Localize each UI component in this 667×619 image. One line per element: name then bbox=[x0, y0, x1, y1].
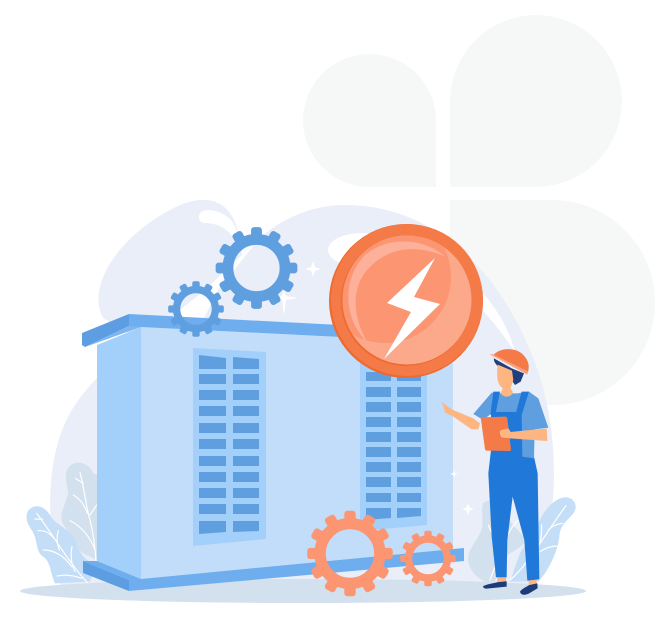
neck and head bbox=[497, 365, 513, 397]
icon: lightning bolt bbox=[384, 258, 440, 359]
hair bbox=[494, 358, 524, 385]
shoes bbox=[483, 581, 538, 595]
sparkles bbox=[276, 261, 474, 515]
forearm bbox=[500, 428, 547, 441]
building bbox=[82, 314, 464, 591]
window panel right bbox=[360, 340, 427, 531]
background petals bbox=[303, 15, 655, 405]
gear: small blue bbox=[168, 281, 224, 337]
gear: large orange bbox=[307, 511, 393, 596]
overalls bbox=[488, 412, 539, 581]
clipboard bbox=[481, 417, 511, 451]
hard hat bbox=[489, 349, 529, 374]
plant: left gray leaf bbox=[61, 463, 97, 562]
lavender background blob bbox=[50, 200, 554, 585]
gear: large blue bbox=[216, 227, 297, 309]
overall straps bbox=[490, 392, 529, 415]
shirt bbox=[473, 392, 548, 458]
pointing arm bbox=[441, 402, 480, 429]
roof bbox=[82, 314, 340, 347]
plinth bbox=[83, 548, 464, 591]
ankles bbox=[497, 575, 537, 586]
gear: small orange bbox=[400, 531, 456, 586]
building left face bbox=[97, 327, 141, 579]
ground shadow bbox=[20, 579, 586, 603]
coin with lightning bolt bbox=[329, 224, 483, 378]
plant: left blue leaf bbox=[27, 506, 97, 583]
window panel left bbox=[193, 348, 266, 546]
plant: right gray leaf bbox=[468, 501, 527, 582]
worker bbox=[441, 349, 548, 595]
white swooshes in blob bbox=[170, 210, 515, 352]
plant: right blue leaf bbox=[488, 497, 576, 582]
building front face bbox=[141, 327, 453, 579]
